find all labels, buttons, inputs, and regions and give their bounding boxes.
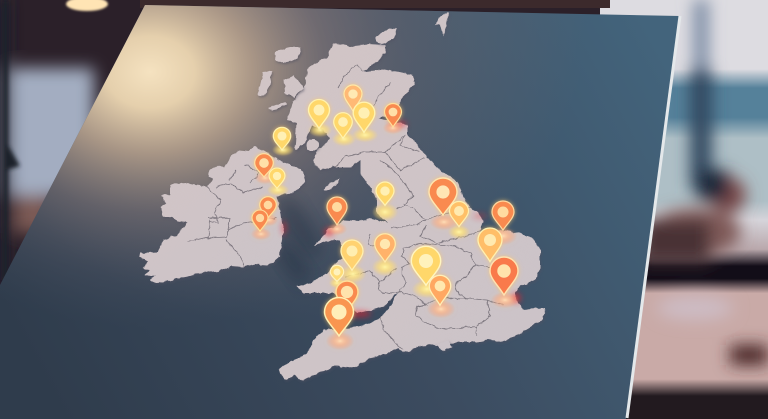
pin: Dublin south orange: [251, 210, 271, 240]
pin: Antrim coast yellow: [272, 127, 294, 156]
pin: Lancashire yellow: [372, 182, 398, 221]
pin: Shropshire light orange: [372, 234, 398, 276]
pin: East Anglia yellow-orange: [478, 228, 502, 262]
red coastal glows: [282, 121, 521, 317]
pin: Anglesey orange: [327, 197, 347, 235]
desk lamp glow: [66, 0, 108, 11]
pin: South Wales orange: [336, 281, 358, 312]
pin: Lincolnshire yellow: [448, 202, 470, 239]
pin: Mid Wales yellow: [340, 240, 366, 283]
pin: Glasgow yellow: [332, 113, 356, 146]
map: Ireland: [138, 147, 305, 283]
pin: Edinburgh orange: [383, 104, 403, 134]
map: islands: [258, 13, 453, 351]
pin: Yorkshire large orange: [429, 178, 458, 230]
pin: Norfolk coast orange: [489, 201, 517, 245]
pin: London large red-orange: [490, 257, 519, 308]
pin: Northern Ireland orange: [255, 154, 275, 184]
pin: Perth orange: [344, 85, 362, 111]
pin: Western Scotland yellow: [308, 100, 332, 137]
pin: Belfast yellow: [267, 168, 289, 196]
map: region borders: [335, 65, 503, 350]
pin: Pembrokeshire small yellow: [329, 265, 345, 288]
pin: Devon large orange: [324, 298, 354, 350]
pin: Oxfordshire large yellow: [411, 246, 442, 298]
pin: Dublin north orange: [260, 197, 278, 226]
pins: [251, 85, 519, 350]
map: Great Britain: [278, 43, 545, 381]
pin: Central Scotland large yellow: [352, 102, 378, 142]
pin: Hampshire orange: [427, 275, 455, 318]
